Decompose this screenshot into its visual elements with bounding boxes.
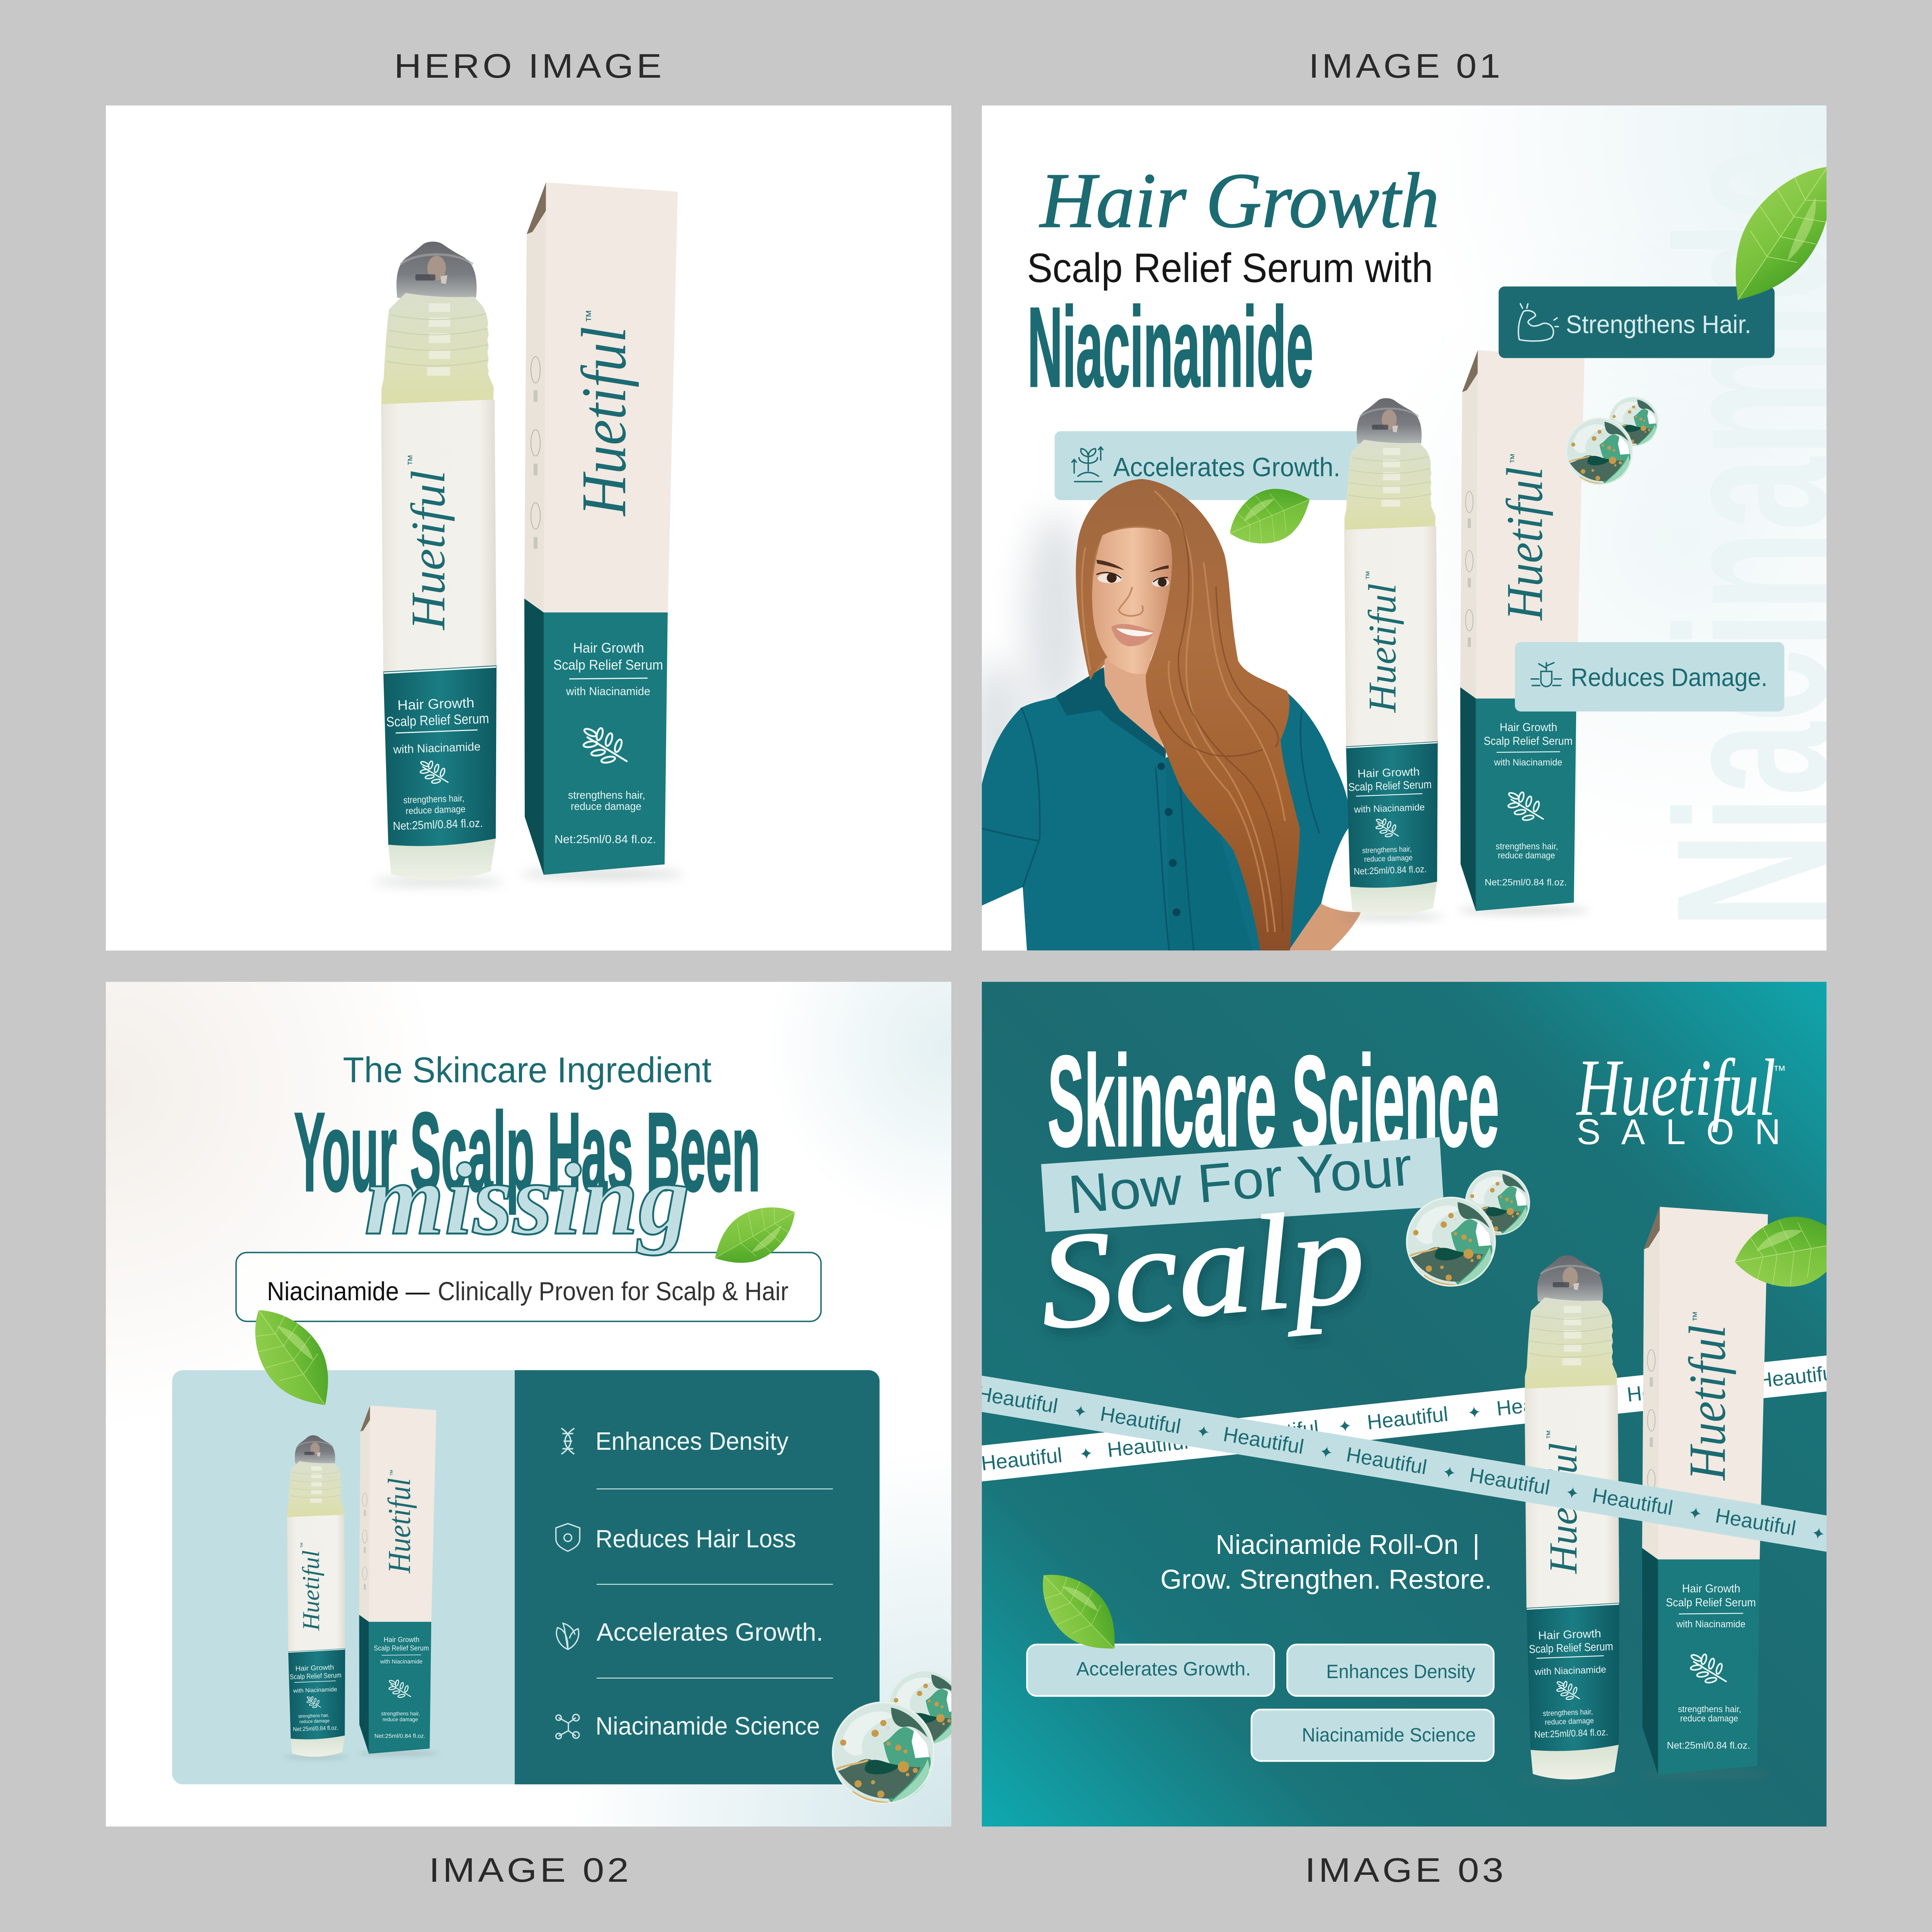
tagline: Grow. Strengthen. Restore. <box>1160 1564 1492 1594</box>
subtitle: The Skincare Ingredient: The Skincare Ingredient <box>343 1050 712 1090</box>
feature: Reduces Hair Loss <box>556 1524 833 1584</box>
logo: Huetiful Salon: ™ <box>1773 1063 1786 1078</box>
product: bottle and box: Huetiful <box>1679 1325 1736 1481</box>
ribbon: white: Heautiful <box>1495 1389 1578 1420</box>
product: bottle and box: Scalp Relief Serum <box>1348 779 1432 794</box>
product: bottle and box: with Niacinamide <box>1676 1619 1745 1629</box>
product: bottle and box: Huetiful <box>297 1550 324 1631</box>
chip: Enhances Density <box>1287 1645 1494 1696</box>
product: bottle and box: Hair Growth <box>397 695 474 713</box>
title: Hair Growth: Hair Growth <box>1039 157 1440 244</box>
ribbon: white: Heautiful <box>1756 1361 1840 1393</box>
logo: Huetiful Salon <box>1576 1042 1786 1152</box>
ribbon: light blue: ✦ <box>1072 1401 1088 1422</box>
product: bottle and box: reduce damage <box>1544 1716 1594 1727</box>
ribbon: light blue: Heautiful <box>1714 1504 1798 1540</box>
product: bottle and box: Hair Growth <box>1500 721 1557 734</box>
feature: Niacinamide Science: Niacinamide Science <box>595 1712 820 1740</box>
product: bottle and box: strengthens hair, <box>1678 1704 1741 1714</box>
tagline <box>1160 1529 1492 1594</box>
ribbon: light blue: Heautiful <box>976 1382 1060 1418</box>
tagline: Niacinamide Roll-On <box>1216 1529 1459 1560</box>
ribbon: light blue: Heautiful <box>1345 1443 1429 1479</box>
leaf: top right <box>1709 147 1857 320</box>
product: bottle and box: Net:25ml/0.84 fl.oz. <box>1354 864 1427 877</box>
product: bottle and box: ™ <box>406 454 418 466</box>
ribbon: white: ✦ <box>1337 1417 1353 1436</box>
product: bottle and box: Net:25ml/0.84 fl.oz. <box>374 1733 425 1740</box>
feature: Accelerates Growth <box>556 1618 833 1678</box>
ribbon: white: ✦ <box>1596 1389 1611 1408</box>
feature: Enhances Density: Enhances Density <box>595 1427 789 1455</box>
panel: image 02: Your Scalp Has Been <box>294 1089 760 1215</box>
product: bottle and box: with Niacinamide <box>380 1658 422 1665</box>
front hair <box>1076 479 1300 951</box>
ribbon: light blue: ✦ <box>1687 1503 1704 1524</box>
banner: Now For Your: Now For Your <box>1066 1136 1414 1225</box>
product: bottle and box: with Niacinamide <box>393 740 481 756</box>
product: bottle and box: ™ <box>1508 453 1520 464</box>
soft shadow behind woman <box>967 513 1088 809</box>
product: bottle and box: with Niacinamide <box>1534 1665 1606 1677</box>
ribbon: white: Heautiful <box>980 1444 1063 1475</box>
card: product side <box>172 1370 515 1784</box>
product: bottle and box: Scalp Relief Serum <box>1529 1640 1613 1656</box>
callout box <box>236 1253 821 1321</box>
script word: Scalp: Scalp <box>1033 1180 1371 1358</box>
pill: Accelerates Growth: Accelerates Growth. <box>1113 452 1340 482</box>
ribbon: light blue: Heautiful <box>1221 1423 1306 1459</box>
product: bottle and box: strengthens hair, <box>403 793 464 806</box>
leaf: near pill <box>1220 475 1320 557</box>
ribbon: light blue: Heautiful <box>1591 1484 1675 1520</box>
product: bottle and box: ™ <box>1545 1430 1555 1439</box>
product: bottle and box: Hair Growth <box>573 640 644 656</box>
logo: Huetiful Salon: SALON <box>1577 1112 1781 1152</box>
product: bottle and box: Scalp Relief Serum <box>289 1671 342 1681</box>
product: bottle and box: Scalp Relief Serum <box>1484 735 1573 748</box>
product: bottle and box: strengthens hair, <box>568 789 645 801</box>
heading: hero image: HERO IMAGE <box>394 47 665 85</box>
product: bottle and box: reduce damage <box>571 800 641 812</box>
ribbon: white <box>965 1352 1864 1483</box>
feature: Reduces Hair Loss: Reduces Hair Loss <box>595 1525 796 1553</box>
forearm <box>1289 904 1361 951</box>
leaf: above card <box>235 1293 349 1422</box>
product: bottle and box: strengthens hair, <box>381 1711 420 1717</box>
product: bottle and box: Huetiful <box>1496 467 1553 621</box>
product: bottle and box: Net:25ml/0.84 fl.oz. <box>1667 1740 1750 1751</box>
ribbon: white: ✦ <box>1467 1403 1482 1422</box>
product: bottle and box: Net:25ml/0.84 fl.oz. <box>293 1725 338 1733</box>
heading: image 01: IMAGE 01 <box>1309 47 1503 85</box>
product: bottle and box: ™ <box>583 310 598 323</box>
product: bottle and box: strengthens hair, <box>1496 841 1558 851</box>
product: bottle and box: reduce damage <box>383 1716 418 1722</box>
chip: Accelerates Growth: Accelerates Growth. <box>1077 1658 1251 1680</box>
product: bottle and box: Net:25ml/0.84 fl.oz. <box>554 833 656 846</box>
shirt <box>982 667 1352 951</box>
face <box>1092 528 1174 674</box>
product: bottle and box: Hair Growth <box>1538 1627 1601 1642</box>
product: bottle and box: with Niacinamide <box>566 685 650 698</box>
ribbon: light blue: ✦ <box>1441 1463 1458 1483</box>
pill: Strengthens Hair: Strengthens Hair. <box>1566 310 1751 338</box>
panel: image 01: Niacinamide <box>1027 284 1313 411</box>
pill: Strengthens Hair <box>1498 286 1775 358</box>
neck <box>1103 653 1167 759</box>
callout box: Niacinamide — <box>267 1277 430 1306</box>
product: bottle and box: Huetiful <box>1542 1443 1585 1575</box>
product: bottle and box: Scalp Relief Serum <box>1666 1596 1756 1609</box>
panel: hero image <box>106 105 951 951</box>
product: bottle and box: with Niacinamide <box>293 1686 337 1694</box>
product: bottle and box: ™ <box>1364 570 1375 580</box>
product: bottle and box: Hair Growth <box>295 1663 334 1672</box>
icon: flexed arm <box>1519 304 1558 341</box>
back hair <box>1076 479 1169 680</box>
product: bottle and box: Scalp Relief Serum <box>386 710 489 730</box>
chip: Niacinamide Science: Niacinamide Science <box>1302 1724 1476 1746</box>
pill: Reduces Damage: Reduces Damage. <box>1571 663 1767 691</box>
heading: image 02: IMAGE 02 <box>429 1851 632 1889</box>
product: bottle and box: Huetiful <box>568 327 639 517</box>
product: bottle and box: Scalp Relief Serum <box>553 657 663 673</box>
ribbon: light blue: ✦ <box>1810 1524 1827 1544</box>
product: bottle and box: Hair Growth <box>1682 1582 1740 1595</box>
product: bottle and box: Hair Growth <box>384 1636 419 1644</box>
heading: image 03: IMAGE 03 <box>1305 1851 1507 1889</box>
product: bottle and box: Scalp Relief Serum <box>374 1645 429 1652</box>
product: bottle and box <box>1518 1207 1773 1784</box>
ribbon: light blue <box>959 1373 1853 1555</box>
product: bottle and box: with Niacinamide <box>1354 802 1425 815</box>
product: bottle and box: reduce damage <box>1498 850 1555 861</box>
product: bottle and box: strengthens hair, <box>1543 1708 1593 1718</box>
product: bottle and box: ™ <box>389 1469 396 1476</box>
panel: image 02 <box>104 981 964 1833</box>
leaf: on callout <box>703 1192 807 1279</box>
card: feature list <box>515 1370 879 1784</box>
callout box: Clinically Proven for Scalp & Hair <box>438 1277 789 1306</box>
product: bottle and box: reduce damage <box>1364 854 1413 864</box>
product: bottle and box: reduce damage <box>299 1718 330 1725</box>
icon: plant with arrows <box>1072 447 1103 481</box>
product: bottle and box: ™ <box>299 1543 306 1548</box>
product: bottle and box <box>283 1405 439 1759</box>
leaf: top right <box>1729 1208 1854 1296</box>
product: bottle and box <box>1338 350 1590 920</box>
ribbon: light blue: ✦ <box>1318 1442 1335 1462</box>
product: bottle and box: Net:25ml/0.84 fl.oz. <box>1534 1727 1608 1740</box>
logo: Huetiful Salon: Huetiful <box>1576 1042 1776 1133</box>
ribbon: white: Heautiful <box>1366 1403 1449 1434</box>
product: bottle and box: Hair Growth <box>1357 766 1420 780</box>
spheres <box>1406 1170 1530 1287</box>
product: bottle and box: ™ <box>1690 1311 1702 1322</box>
chip: Accelerates Growth <box>1027 1645 1274 1696</box>
chip: Enhances Density: Enhances Density <box>1326 1660 1476 1682</box>
ribbon: white: Heautiful <box>1106 1430 1189 1462</box>
woman with long hair <box>967 479 1361 951</box>
product: bottle and box: strengthens hair, <box>1362 845 1412 855</box>
pill: Reduces Damage <box>1515 642 1784 711</box>
product: bottle and box: strengthens hair, <box>298 1713 329 1719</box>
pill: Accelerates Growth <box>1054 431 1369 500</box>
product: bottle and box: Net:25ml/0.84 fl.oz. <box>393 817 483 833</box>
spheres <box>1566 396 1658 485</box>
product: bottle and box: reduce damage <box>1680 1713 1738 1723</box>
panel: image 03 <box>959 981 1864 1833</box>
panel: image 01 <box>967 104 1873 956</box>
product: bottle and box: reduce damage <box>405 804 466 816</box>
leaf: above chips <box>1025 1557 1133 1667</box>
ribbon: light blue: ✦ <box>1195 1422 1211 1442</box>
ribbon: light blue: Heautiful <box>1468 1464 1551 1499</box>
product: bottle and box: Huetiful <box>402 470 455 631</box>
product: bottle and box: Huetiful <box>1361 583 1404 713</box>
feature: Accelerates Growth: Accelerates Growth. <box>597 1618 823 1646</box>
chip: Niacinamide Science <box>1252 1709 1494 1761</box>
ribbon: white: ✦ <box>1207 1430 1222 1450</box>
feature: Enhances Density <box>561 1427 833 1489</box>
tagline: | <box>1473 1529 1480 1560</box>
ribbon: light blue: Heautiful <box>1099 1403 1182 1438</box>
ribbon: light blue: ✦ <box>1564 1483 1580 1503</box>
product: bottle and box: with Niacinamide <box>1494 757 1562 768</box>
product: bottle and box <box>373 182 684 886</box>
script word: missing: missing <box>364 1141 690 1256</box>
product: bottle and box: Huetiful <box>381 1478 417 1573</box>
ribbon: white: Heautiful <box>1626 1375 1709 1406</box>
ribbon: white: ✦ <box>1078 1444 1094 1464</box>
product: bottle and box: Net:25ml/0.84 fl.oz. <box>1485 877 1567 888</box>
subtitle: Scalp Relief Serum with: Scalp Relief Serum with <box>1027 245 1433 291</box>
icon: hair follicle <box>1531 663 1561 687</box>
ribbon: white: Heautiful <box>1236 1417 1320 1448</box>
ribbon: white: ✦ <box>1726 1375 1742 1395</box>
spheres <box>832 1670 964 1804</box>
